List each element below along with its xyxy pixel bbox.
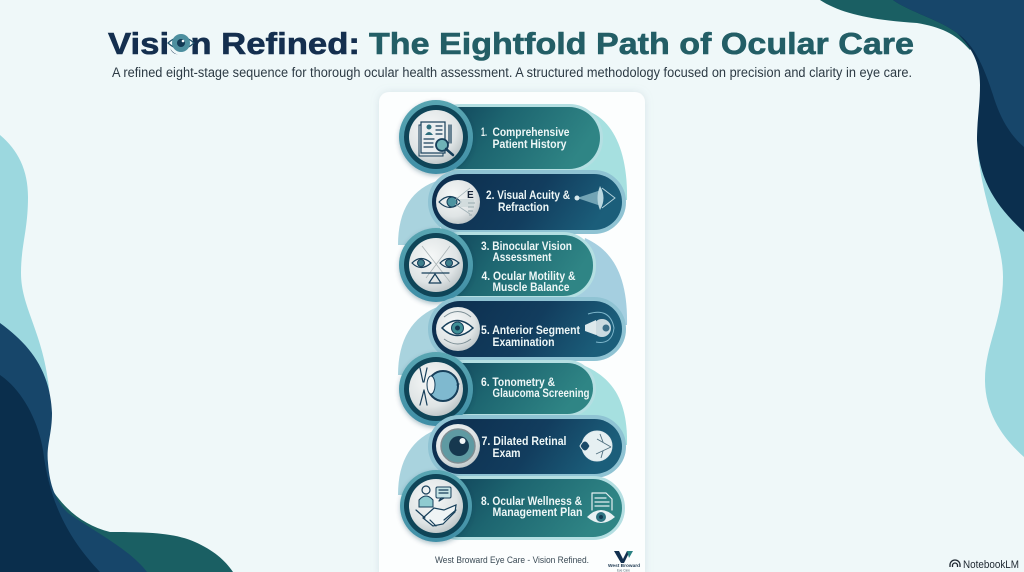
icon: retina — [580, 431, 612, 461]
step 5 — [432, 301, 622, 357]
icon: handshake and consultation — [416, 486, 456, 526]
label: step 2: 2. Visual Acuity & — [486, 190, 570, 202]
step 6 — [399, 352, 593, 426]
watermark: NotebookLM: NotebookLM — [963, 559, 1019, 571]
label: step 7 — [482, 436, 566, 460]
icon: eye with rotation arrows — [442, 312, 473, 344]
step 2 — [432, 174, 622, 230]
icon: acuity chart — [439, 188, 475, 215]
label: step 6: Glaucoma Screening — [492, 388, 590, 400]
subtitle: A refined eight-stage sequence for thorough ocular health assessment. A structured methodology focused on precision and clarity in eye care. — [112, 65, 912, 80]
label: step 2 line 2: Refraction — [498, 202, 549, 214]
label: step 5 — [481, 325, 580, 349]
label: step 3: 3. Binocular Vision — [481, 241, 572, 253]
label: step 5: Examination — [492, 337, 554, 349]
icon: patient record — [419, 122, 453, 156]
title: The Eightfold Path of Ocular Care — [369, 26, 914, 61]
left background waves — [0, 135, 233, 572]
label: step 8 — [481, 496, 582, 519]
label: step 7: 7. Dilated Retinal — [482, 436, 566, 448]
label: step 6: 6. Tonometry & — [481, 377, 555, 389]
label: step 3 — [481, 241, 572, 264]
label: step 1 — [481, 127, 570, 151]
icon: binocular balance — [412, 246, 459, 283]
step 8 — [400, 470, 622, 542]
label: step 1: Patient History — [492, 139, 567, 151]
label: step 6 — [481, 377, 590, 400]
label: step 8: 8. Ocular Wellness & — [481, 496, 582, 508]
label: step 4 — [482, 271, 576, 294]
connector bands — [398, 110, 627, 495]
logo: West Broward Eye Care — [608, 551, 640, 572]
title — [108, 26, 914, 61]
title: Vision Refined: — [108, 26, 360, 61]
label: step 5: 5. Anterior Segment — [481, 325, 580, 337]
icon: plan with eye — [587, 493, 615, 523]
icon: eye in title — [168, 31, 194, 55]
icon: eye cross-section — [420, 368, 459, 405]
step 7 — [432, 419, 622, 474]
step 3 and 4 — [399, 228, 593, 302]
logo: West Broward Eye Care: West Broward — [608, 563, 640, 569]
label: step 1: Comprehensive — [492, 127, 570, 139]
step 1 — [399, 100, 600, 174]
panel: pathway card — [379, 92, 645, 572]
icon: dilated pupil — [441, 429, 475, 463]
label: step 4: Muscle Balance — [492, 282, 570, 294]
icon: eyeball side view — [585, 312, 614, 342]
label: step 4: 4. Ocular Motility & — [482, 271, 576, 283]
icon: acuity chart: E — [467, 190, 474, 201]
icon: lens — [574, 186, 615, 210]
label: step 8: Management Plan — [492, 507, 582, 519]
label: step 1: 1. — [481, 127, 487, 139]
footer tagline: West Broward Eye Care - Vision Refined. — [435, 555, 589, 566]
label: step 7: Exam — [492, 448, 520, 460]
right background waves — [820, 0, 1024, 457]
label: step 3: Assessment — [492, 252, 552, 264]
